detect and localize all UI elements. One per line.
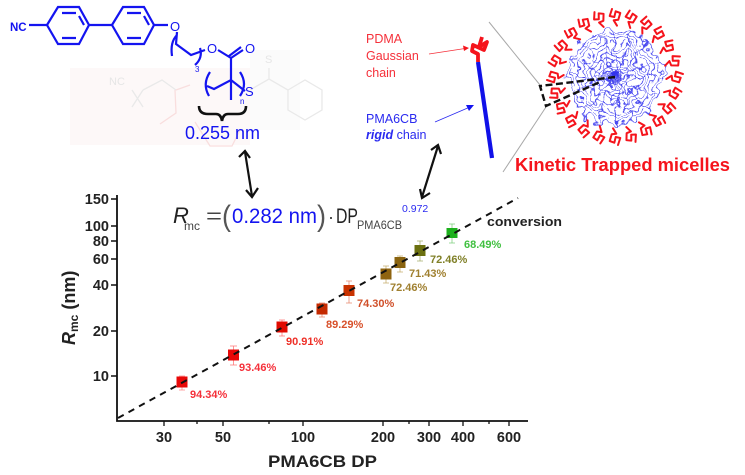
equation: · [328,207,334,227]
equation: = [206,205,222,228]
label: PMA6CB rigid chain [366,112,426,142]
y-axis title: (nm) [59,271,79,315]
x-axis tick labels [156,430,521,446]
dashed wedge [540,77,615,106]
x-axis tick labels: 400 [451,430,475,446]
y-axis tick labels: 80 [93,234,109,250]
y-axis tick labels: 150 [85,192,109,208]
equation: ) [317,200,326,233]
label: oxygen atoms: S [245,84,254,99]
x-axis tick labels: 30 [156,430,172,446]
label: 0.255 nm: 0.255 nm [185,123,260,143]
equation: 0.282 nm [232,205,317,228]
y-axis title: R [59,332,79,345]
label: oxygen atoms: 3 [195,65,200,74]
x-axis tick labels: 50 [215,430,231,446]
faint ghosted chemical structure [70,50,322,146]
equation: DP [336,205,358,228]
faint ghosted chemical structure: NC [109,76,125,88]
label: 0.972: 0.972 [402,203,428,215]
data markers [176,228,458,388]
label: oxygen atoms: n [240,97,244,106]
fit line [118,198,518,418]
y-axis tick labels: 10 [93,369,109,385]
conversion labels: 89.29% [326,319,364,331]
x-axis tick labels: 200 [371,430,395,446]
zoom guide lines [489,22,546,172]
label: PDMA Gaussian chain [366,32,419,80]
conversion labels [190,239,502,401]
label: NC group: NC [10,22,27,34]
equation: mc [184,219,200,233]
micelle corona: red coils [547,9,683,145]
label: PMA6CB rigid chain: rigid chain [366,128,426,142]
y-axis tick labels: 40 [93,278,109,294]
micelle core: blue chains [567,29,663,125]
brace under repeat unit [199,106,246,121]
single chain schematic: rod and coil [472,37,492,158]
equation: PMA6CB [357,220,402,232]
conversion labels: 94.34% [190,389,228,401]
label: oxygen atoms [170,19,255,106]
x-axis tick labels: 600 [497,430,521,446]
arrow: PMA6CB label to rod [435,105,474,122]
label: PDMA Gaussian chain: chain [366,66,396,80]
conversion labels: 74.30% [357,298,395,310]
micelle [540,9,683,145]
label: PDMA Gaussian chain: Gaussian [366,49,419,63]
label: PMA6CB rigid chain: PMA6CB [366,112,417,126]
x-axis title: PMA6CB DP [268,452,377,471]
y-axis tick labels [85,192,109,385]
conversion labels: 71.43% [409,268,447,280]
label: oxygen atoms: O [207,41,217,56]
equation [173,200,402,233]
double arrow: rod to 0.972 [420,145,441,198]
y-axis title: mc [67,314,81,332]
chemical structure: PMA6CB monomer [10,7,255,106]
equation: R [173,203,189,228]
x-axis tick labels: 100 [291,430,315,446]
y-axis tick labels: 100 [85,219,109,235]
axes [111,195,528,426]
conversion labels: 72.46% [390,282,428,294]
label: oxygen atoms: O [245,41,255,56]
legend label: conversion: conversion [487,214,562,229]
x-axis tick labels: 300 [417,430,441,446]
faint ghosted chemical structure: S [265,54,272,66]
y-axis tick labels: 20 [93,324,109,340]
equation: ( [222,200,231,233]
double arrow: monomer to equation [239,151,258,197]
conversion labels: 93.46% [239,362,277,374]
heading: Kinetic Trapped micelles: Kinetic Trapped micelles [515,155,730,175]
conversion labels: 72.46% [430,254,468,266]
label: oxygen atoms: O [170,19,180,34]
conversion labels: 68.49% [464,239,502,251]
label: PDMA Gaussian chain: PDMA [366,32,403,46]
y-axis tick labels: 60 [93,252,109,268]
chart: Rmc vs PMA6CB DP [59,192,562,471]
conversion labels: 90.91% [286,336,324,348]
error bars [179,224,455,390]
arrow: PDMA label to coil [429,46,469,54]
